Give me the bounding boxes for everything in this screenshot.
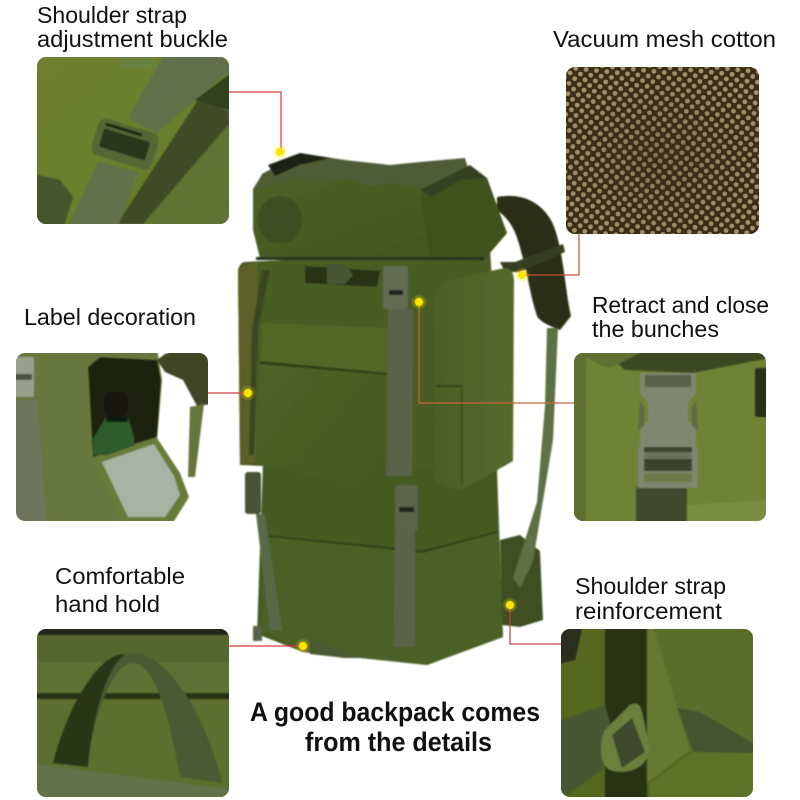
heading: retract and close the bunches: Retract and close [592,292,769,318]
hotspot: label decoration [240,385,256,401]
heading: shoulder strap adjustment buckle: adjustment buckle [37,26,228,52]
panel: shoulder strap buckle photo [37,57,229,224]
panel: hand hold photo [37,629,229,797]
long shoulder strap [513,328,558,588]
connector: vacuum mesh [522,234,579,275]
front pocket [255,323,390,485]
connector: label decoration [208,392,248,394]
strap under buckle [636,486,688,521]
hotspot: retract and close [411,294,427,310]
heading: shoulder strap adjustment buckle [37,2,228,52]
buckle [91,118,159,170]
lid [253,165,507,261]
upper body [238,250,500,475]
connector: hand hold [229,645,303,647]
top strip [618,353,766,374]
connector: retract and close [419,302,574,403]
shoulder pad and strap [156,353,208,406]
bottle [93,392,134,455]
hotspot: strap reinforcement [502,597,518,613]
buckle [16,356,35,398]
heading: comfortable hand hold: hand hold [55,591,160,617]
upper centre strap [386,309,413,476]
backpack [238,153,571,665]
tagline: from the details [305,727,492,757]
panel: side pocket photo [16,353,208,521]
hotspot: hand hold [295,638,311,654]
left side straps [249,270,270,455]
hotspot: vacuum mesh [514,267,530,283]
heading: shoulder strap reinforcement: Shoulder strap [575,573,726,599]
heading: label decoration: Label decoration [24,304,196,330]
buckle [601,704,650,772]
buckle [638,373,698,488]
heading: vacuum mesh cotton: Vacuum mesh cotton [553,26,776,52]
lower side-release buckle [395,485,418,530]
connector: shoulder buckle [229,92,281,152]
shoulder pad [497,196,571,330]
open flap [108,438,190,521]
lid top straps [255,153,470,190]
heading: retract and close the bunches [592,292,769,342]
upper side-release buckle [383,266,408,309]
connector: strap reinforcement [510,605,561,644]
panel: vacuum mesh fabric photo [566,67,759,234]
lower body [257,462,503,665]
hotspot: shoulder buckle [272,144,288,160]
heading: comfortable hand hold [55,563,185,617]
handle strap [92,654,222,783]
tagline: A good backpack comes [250,697,540,727]
side pocket [434,268,514,491]
rear lower pad [500,535,543,627]
lower centre strap [393,530,415,647]
heading: retract and close the bunches: the bunches [592,316,719,342]
heading: shoulder strap reinforcement: reinforcement [575,598,723,624]
dark strap behind [117,97,229,224]
heading: shoulder strap reinforcement [575,573,726,624]
webbing [677,708,758,753]
panel: side release buckle photo [574,353,766,521]
tagline [250,697,540,757]
heading: shoulder strap adjustment buckle: Shoulder strap [37,2,187,28]
opening [88,357,161,457]
heading: comfortable hand hold: Comfortable [55,563,185,589]
panel: strap reinforcement photo [555,625,758,800]
horizontal buckle strap [305,265,380,287]
strap on left [16,400,47,521]
bottom handle strap [303,640,358,658]
